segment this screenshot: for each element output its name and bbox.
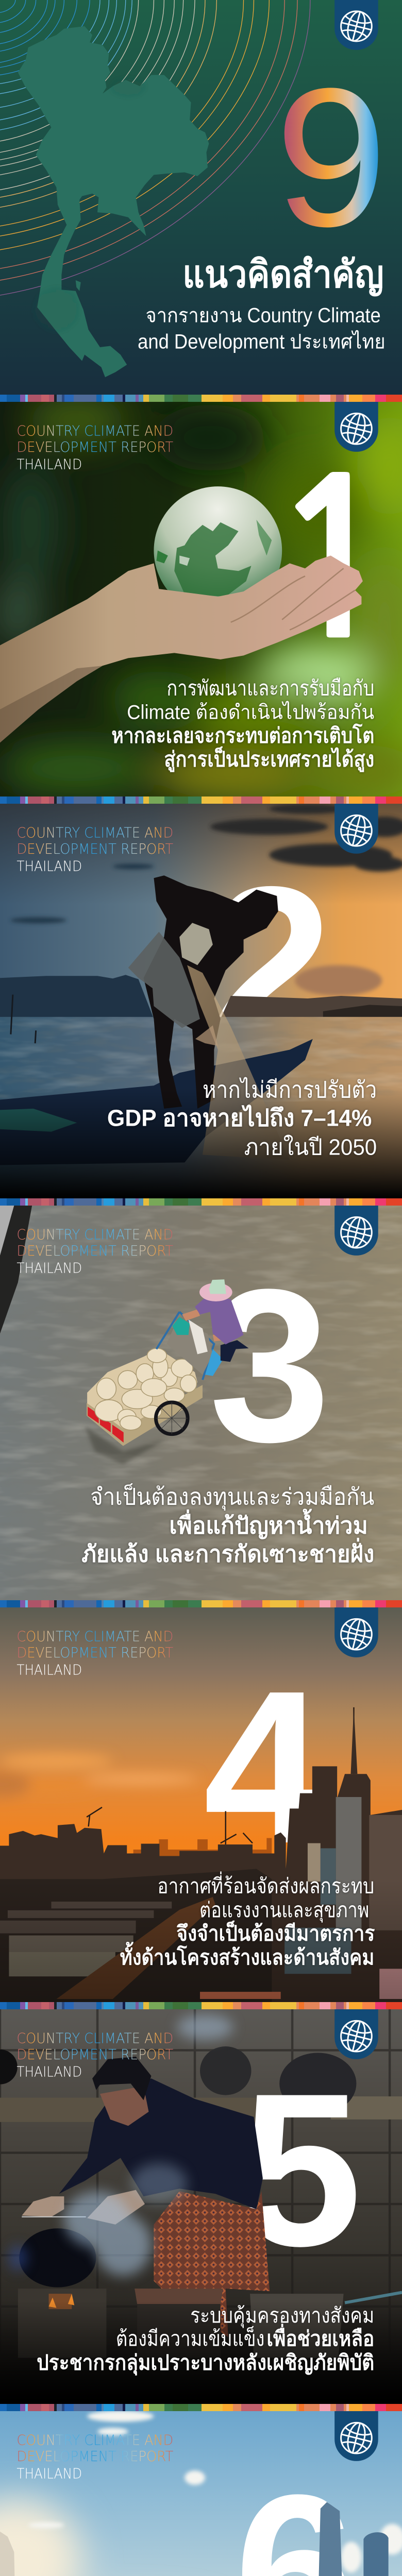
- caption 3: [81, 1483, 374, 1567]
- number 2: 2: [211, 841, 332, 1084]
- hanging pots: [0, 2046, 356, 2114]
- icon: World Bank logo: [334, 402, 378, 452]
- report title: COUNTRY CLIMATE AND: [16, 2030, 173, 2047]
- caption 3: จำเป็นต้องลงทุนและร่วมมือกัน: [90, 1483, 374, 1511]
- skyline: [0, 2502, 389, 2576]
- caption 4: ต่อแรงงานและสุขภาพ: [199, 1898, 369, 1923]
- colour bar: [0, 1600, 402, 1607]
- caption 4: [120, 1872, 375, 1969]
- report title: DEVELOPMENT REPORT: [16, 2448, 173, 2465]
- report title: DEVELOPMENT REPORT: [16, 438, 173, 455]
- report title: [16, 2432, 173, 2482]
- report title: DEVELOPMENT REPORT: [16, 2046, 173, 2063]
- subheading: [138, 304, 386, 353]
- report title: DEVELOPMENT REPORT: [16, 840, 173, 857]
- caption 4: จึงจำเป็นต้องมีมาตรการ: [176, 1921, 375, 1945]
- caption 5: ต้องมีความเข้มแข็ง: [116, 2326, 264, 2350]
- caption 1: Climate ต้องดำเนินไปพร้อมกัน: [127, 701, 374, 723]
- report title: [16, 2030, 173, 2080]
- caption 5: [37, 2303, 374, 2376]
- mountains and water: [0, 975, 402, 1198]
- smoke: [9, 2014, 233, 2276]
- net and fisherman: [128, 875, 290, 1160]
- number 1: 1: [267, 454, 399, 670]
- boat: [0, 1039, 313, 1165]
- caption 2: GDP อาจหายไปถึง 7–14%: [107, 1105, 372, 1131]
- caption 3: ภัยแล้ง และการกัดเซาะชายฝั่ง: [81, 1537, 374, 1567]
- stoves and pot: [18, 2228, 402, 2358]
- number 3: 3: [209, 1244, 330, 1487]
- caption 4: อากาศที่ร้อนจัดส่งผลกระทบ: [157, 1872, 374, 1898]
- icon: World Bank logo: [334, 0, 378, 50]
- caption 5: ระบบคุ้มครองทางสังคม: [190, 2303, 374, 2328]
- caption 2: ภายในปี 2050: [244, 1134, 377, 1160]
- report title: THAILAND: [16, 2063, 82, 2080]
- caption 5: ประชากรกลุ่มเปราะบางหลังเผชิญภัยพิบัติ: [37, 2350, 374, 2376]
- report title: [16, 422, 173, 473]
- report title: COUNTRY CLIMATE AND: [16, 824, 173, 841]
- colour bar: [0, 1198, 402, 1206]
- map of Thailand: [18, 26, 209, 377]
- report title: DEVELOPMENT REPORT: [16, 1644, 173, 1661]
- panel: point 2: [0, 796, 402, 1193]
- panel: point 3: [0, 1198, 402, 1600]
- colour bar: [0, 395, 402, 402]
- report title: [16, 824, 173, 875]
- report title: [16, 1226, 173, 1277]
- panel: point 1: [0, 395, 402, 796]
- report title: COUNTRY CLIMATE AND: [16, 2432, 173, 2449]
- panel: point 5: [0, 2002, 402, 2376]
- colour bar: [0, 2002, 402, 2009]
- report title: COUNTRY CLIMATE AND: [16, 1628, 173, 1645]
- canal wall: [0, 1206, 32, 1334]
- icon: World Bank logo: [334, 804, 378, 854]
- report title: THAILAND: [16, 858, 82, 875]
- report title: THAILAND: [16, 1260, 82, 1277]
- hand holding globe: [0, 555, 363, 743]
- colour bar: [0, 796, 402, 804]
- icon: World Bank logo: [334, 2009, 378, 2059]
- caption 3: เพื่อแก้ปัญหาน้ำท่วม: [169, 1509, 368, 1539]
- report title: COUNTRY CLIMATE AND: [16, 1226, 173, 1243]
- caption 1: สู่การเป็นประเทศรายได้สูง: [164, 746, 374, 772]
- icon: World Bank logo: [334, 1607, 378, 1657]
- number 9 rainbow: 9: [275, 47, 388, 268]
- report title: [16, 1628, 173, 1679]
- icon: World Bank logo: [334, 1206, 378, 1256]
- report title: DEVELOPMENT REPORT: [16, 1242, 173, 1259]
- panel: point 6: [0, 2404, 402, 2576]
- number 4: 4: [204, 1645, 326, 1889]
- caption 2: [107, 1077, 377, 1160]
- panel: point 4: [0, 1600, 402, 2002]
- report title: THAILAND: [16, 1662, 82, 1679]
- panel: hero title: [0, 0, 402, 395]
- caption 5: เพื่อช่วยเหลือ: [266, 2324, 374, 2350]
- colour bar: [0, 2404, 402, 2411]
- number 5: 5: [241, 2048, 362, 2292]
- report title: COUNTRY CLIMATE AND: [16, 422, 173, 439]
- glass globe: [154, 486, 282, 615]
- cart vendor in flood: [85, 1279, 249, 1464]
- caption 4: ทั้งด้านโครงสร้างและด้านสังคม: [120, 1942, 374, 1969]
- icon: World Bank logo: [334, 2411, 378, 2461]
- city skyline: [0, 1707, 402, 2002]
- caption 2: หากไม่มีการปรับตัว: [203, 1077, 377, 1103]
- woman cooking: [22, 2057, 270, 2337]
- caption 1: [111, 676, 374, 772]
- report title: THAILAND: [16, 456, 82, 473]
- report title: THAILAND: [16, 2465, 82, 2482]
